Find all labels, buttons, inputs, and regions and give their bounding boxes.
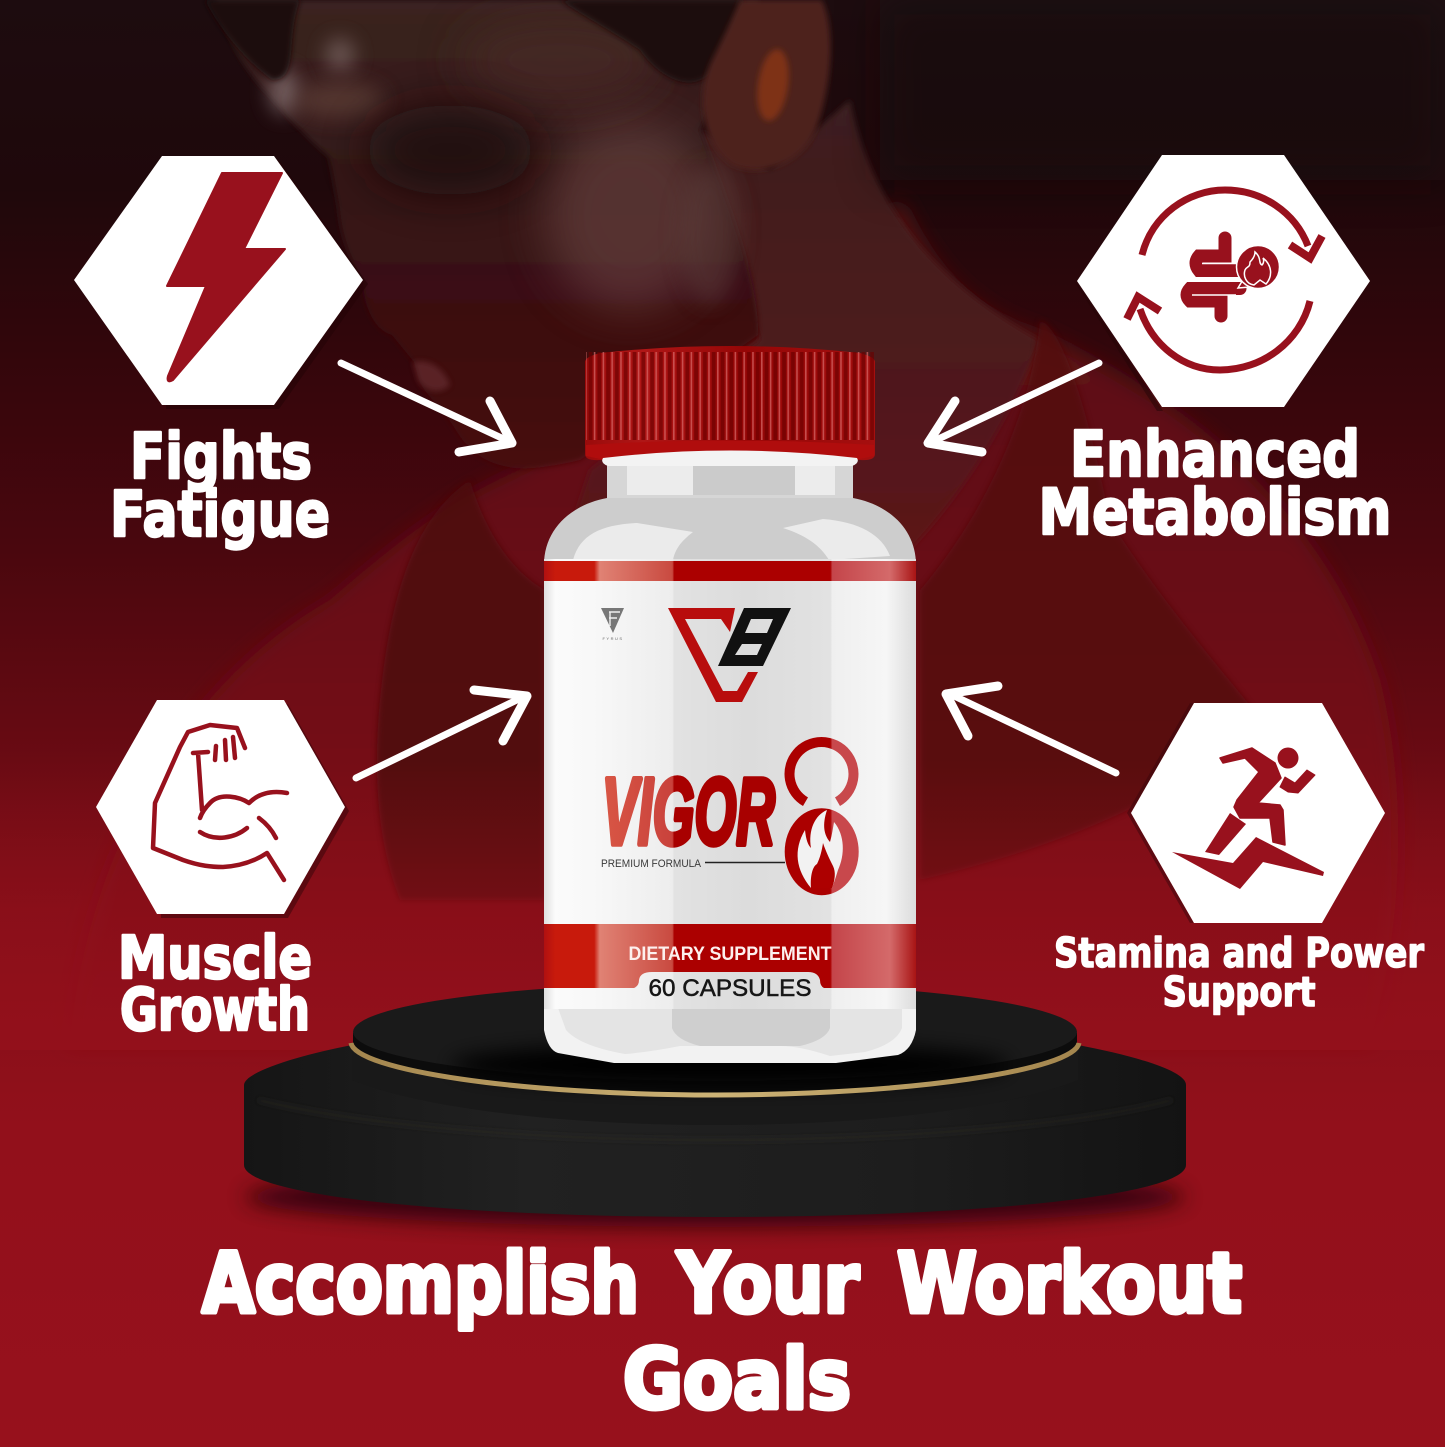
icon: lightning bolt: [167, 173, 285, 381]
intestine: [1187, 238, 1240, 316]
lit cheek: [545, 120, 715, 310]
flame: [798, 810, 843, 888]
hexagon shadow: [1074, 281, 1163, 411]
heading: Enhanced Metabolism: Enhanced: [1070, 418, 1360, 491]
top stripe: [544, 561, 916, 581]
logo: V8: [668, 608, 791, 702]
podium shadow: [245, 1167, 1185, 1227]
brand mark: FYRUS: [602, 636, 624, 641]
wordmark: VIGOR: VIGOR: [602, 759, 775, 865]
red band: [544, 924, 916, 988]
upper tier top: [353, 983, 1077, 1081]
heading: Stamina and Power Support: [1054, 929, 1425, 1016]
headline: Goals: [623, 1331, 851, 1428]
gold ring: [351, 1043, 1079, 1095]
capsule count: 60 CAPSULES: [648, 975, 812, 1002]
product bottle: [544, 346, 916, 1063]
lips: [413, 361, 450, 391]
icon: metabolism cycle: [1127, 190, 1322, 370]
lit jaw: [680, 165, 740, 305]
icon: flexed arm: [153, 725, 287, 880]
tank top left: [377, 480, 545, 900]
hexagon shadow: [166, 160, 368, 409]
upper gloom: [880, 0, 1445, 180]
neck ring: [602, 450, 858, 466]
heading: Muscle Growth: Growth: [120, 975, 310, 1044]
numeral 8 with flame: [785, 742, 859, 895]
brand mark: [601, 608, 624, 641]
heading: Muscle Growth: Muscle: [118, 923, 312, 992]
podium: [244, 983, 1186, 1227]
forehead: [460, 15, 660, 105]
lower tier: [244, 1045, 1186, 1217]
middle tier: [352, 1045, 1078, 1125]
hexagon: [1077, 155, 1370, 407]
band text: DIETARY SUPPLEMENT: [628, 943, 832, 965]
tagline: PREMIUM FORMULA: [601, 858, 702, 870]
bottle shoulder and neck: [544, 455, 916, 600]
hexagon: [96, 700, 345, 914]
tank top right: [920, 320, 1262, 880]
heading: Fights Fatigue: Fights: [130, 420, 312, 493]
athlete photo backdrop: [0, 0, 1445, 1050]
arrow: stamina to bottle: [946, 686, 1116, 773]
label: [544, 559, 916, 1009]
neck: [560, 100, 1040, 560]
headline: [202, 1235, 1242, 1428]
headline: Your: [676, 1235, 859, 1332]
heading: Fights Fatigue: [110, 420, 330, 551]
lower body: [544, 980, 916, 1063]
arrow: metabolism to bottle: [928, 363, 1099, 452]
hexagon shadow: [161, 704, 349, 918]
heading: Fights Fatigue: Fatigue: [110, 478, 330, 551]
neck band: [607, 460, 853, 498]
hair: [205, 0, 745, 82]
heading: Muscle Growth: [118, 923, 312, 1044]
cap: [585, 346, 875, 460]
panel: enhanced metabolism: [1074, 155, 1370, 411]
icon: runner: [1172, 748, 1324, 889]
panel: stamina and power: [1127, 703, 1385, 923]
upper tier side: [353, 1033, 1077, 1095]
torso and shoulders: [70, 200, 1398, 1040]
heading: Enhanced Metabolism: [1038, 418, 1392, 549]
headline: Accomplish: [202, 1235, 639, 1332]
eye socket: [365, 105, 535, 195]
arrow: fatigue to bottle: [341, 363, 512, 452]
hexagon: [1131, 703, 1385, 923]
icon: flame bubble: [1236, 246, 1280, 288]
hexagon shadow: [1127, 703, 1194, 923]
headline: Workout: [897, 1235, 1242, 1332]
bottle contact shadow: [450, 1043, 1010, 1087]
hexagon: [74, 156, 363, 405]
lower fade: [0, 760, 1445, 1050]
shoulder highlights: [573, 523, 693, 560]
head: [215, 0, 760, 468]
panel: fights fatigue: [74, 156, 368, 409]
forehead shine: [270, 70, 298, 114]
arrow: muscle to bottle: [356, 690, 527, 778]
heading: Stamina and Power Support: Support: [1162, 968, 1316, 1016]
panel: muscle growth: [96, 700, 349, 918]
heading: Enhanced Metabolism: Metabolism: [1038, 476, 1392, 549]
ear: [703, 0, 831, 170]
